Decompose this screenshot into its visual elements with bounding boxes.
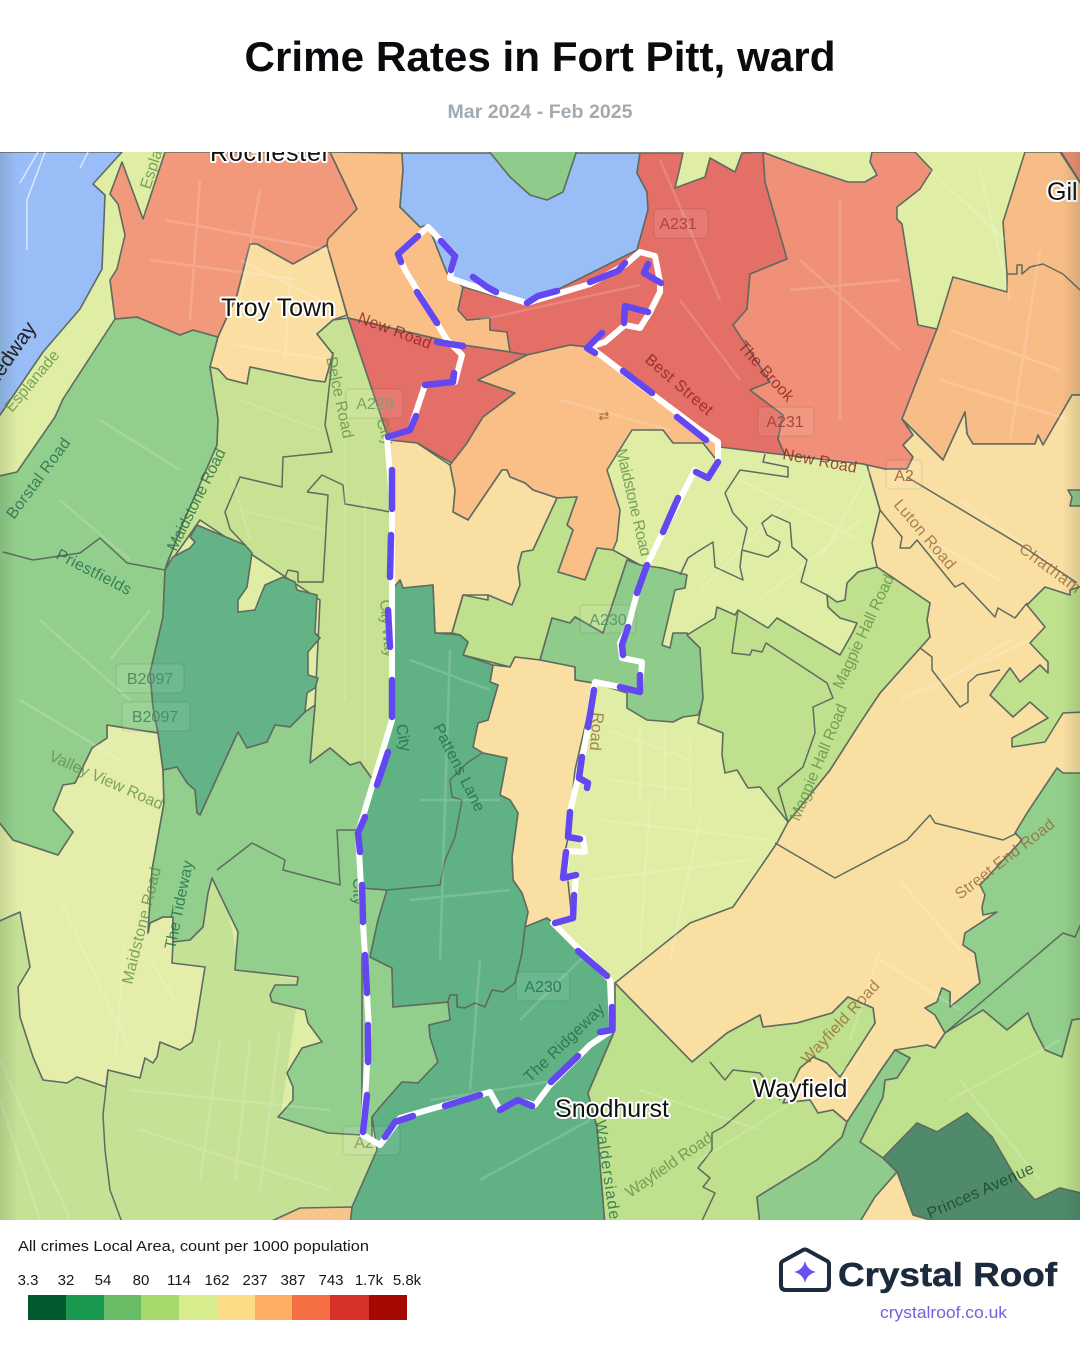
yellow patch bottom south-east <box>860 1172 926 1220</box>
logo url: crystalroof.co.uk <box>880 1303 1008 1322</box>
legend tick values: 80 <box>133 1272 149 1289</box>
road number badges: B2097 <box>132 709 178 726</box>
road name labels: Maidstone Road <box>612 447 654 558</box>
road number badges: A231 <box>659 216 697 233</box>
road name labels: The Tideway <box>162 859 197 951</box>
road name labels: City <box>392 723 414 753</box>
road number badges: A2 <box>354 1135 374 1152</box>
road name labels: Road <box>586 712 606 751</box>
light green east <box>687 567 930 822</box>
logo wordmark: Crystal Roof <box>838 1256 1058 1293</box>
road name labels: Espla <box>138 148 166 191</box>
south-west light green area <box>0 870 377 1225</box>
road name labels: The Ridgeway <box>521 1001 608 1086</box>
road number badges: A231 <box>766 414 804 431</box>
road name labels: City Way <box>376 599 398 658</box>
salmon far corner <box>1061 152 1080 181</box>
road name labels: Magpie Hall Road <box>787 702 851 824</box>
big left green area <box>0 317 218 855</box>
legend title: All crimes Local Area, count per 1000 population <box>18 1238 369 1255</box>
road name labels: Borstal Road <box>4 435 74 522</box>
river Medway <box>0 152 122 415</box>
salmon east area <box>733 152 937 469</box>
Delce light green area <box>165 318 392 780</box>
legend tick values: 54 <box>95 1272 111 1289</box>
orange top right <box>902 152 1080 460</box>
place name labels: Wayfield <box>753 1075 847 1103</box>
bay water <box>400 153 648 305</box>
road name labels: Wayfield Road <box>798 978 884 1068</box>
map edge shading <box>0 152 18 1220</box>
road name labels: Street End Road <box>952 816 1058 903</box>
green peninsula <box>488 150 577 200</box>
road number badges: B2097 <box>127 671 173 688</box>
medium green A230 area <box>540 560 705 722</box>
crime-rate areas <box>0 150 1080 1225</box>
road number badges: A230 <box>589 612 627 629</box>
legend tick values: 743 <box>318 1272 344 1289</box>
legend tick values <box>18 1272 422 1289</box>
road name labels: Priestfields <box>53 546 134 599</box>
interior area boundaries <box>3 264 1080 1225</box>
place name labels: Gil <box>1047 178 1078 206</box>
medium green strip inside ward <box>362 888 450 1140</box>
yellow below centre <box>389 440 557 633</box>
Rochester salmon area <box>110 152 357 337</box>
road name labels: Luton Road <box>890 497 959 573</box>
logo: Crystal Roof <box>781 1250 1058 1322</box>
road number badges <box>116 209 922 1155</box>
road name labels: The Brook <box>734 338 798 406</box>
ward light green <box>452 497 640 667</box>
road name labels: Maidstone Road <box>119 865 165 986</box>
medium green east edge <box>925 768 1080 1057</box>
light green north-east pocket <box>990 585 1080 747</box>
place name labels <box>210 139 1078 1123</box>
subtitle: date range: Mar 2024 - Feb 2025 <box>448 102 633 123</box>
title: Crime Rates in Fort Pitt, ward <box>244 33 836 80</box>
legend tick values: 1.7k <box>355 1272 384 1289</box>
medium green strip south-east <box>757 1050 910 1225</box>
legend <box>18 1238 422 1320</box>
red east area <box>458 152 787 455</box>
Troy Town yellow area <box>210 244 347 384</box>
road name labels: Waldersiade <box>591 1119 623 1221</box>
ward boundary: blue dashes <box>358 236 718 1137</box>
ward boundary: white line <box>358 227 718 1145</box>
dark green west area <box>150 525 320 815</box>
place name labels: Snodhurst <box>555 1095 669 1123</box>
road name labels: Best Street <box>641 351 716 419</box>
road name labels: City <box>349 878 367 906</box>
legend colour scale <box>28 1295 407 1320</box>
small green patch <box>1068 490 1080 506</box>
orange central north area <box>327 152 510 352</box>
road name labels: New Road <box>356 310 434 353</box>
icon: house with sparkle <box>781 1250 829 1290</box>
faint streets <box>0 160 1070 1220</box>
legend tick values: 162 <box>204 1272 230 1289</box>
road name labels: New Road <box>781 446 858 477</box>
legend tick values: 237 <box>242 1272 268 1289</box>
legend tick values: 32 <box>58 1272 74 1289</box>
legend tick values: 3.3 <box>18 1272 38 1289</box>
orange patch bottom <box>272 1206 353 1220</box>
darkest green south-east <box>883 1113 1080 1225</box>
road name labels <box>0 148 1080 1223</box>
railway station icon: ⇄ <box>599 408 610 423</box>
road number badges: A2 <box>894 468 914 485</box>
medium green south-west area <box>148 705 373 1135</box>
road name labels: Princes Avenue <box>925 1160 1037 1223</box>
place name labels: Rochester <box>210 139 330 167</box>
dark green south <box>350 918 615 1225</box>
road name labels: Magpie Hall Road <box>830 572 898 692</box>
place name labels: Troy Town <box>221 294 335 322</box>
map base <box>0 152 1024 1149</box>
road name labels: Maidstone Road <box>164 446 230 554</box>
road name labels: City <box>372 416 397 447</box>
road name labels: Esplanade <box>2 347 63 416</box>
orange central area <box>450 345 718 580</box>
road name labels: Delce Road <box>322 355 356 440</box>
road number badges: A229 <box>356 396 394 413</box>
road name labels: Valley View Road <box>46 748 166 813</box>
road name labels: Wayfield Road <box>623 1129 716 1201</box>
road name labels: Pattens Lane <box>429 721 488 815</box>
yellow strip <box>473 657 595 927</box>
road number badges: A230 <box>524 979 562 996</box>
river piers <box>20 152 88 250</box>
dark green centre <box>358 580 528 1008</box>
light green south-east <box>588 983 875 1225</box>
south-west pale area <box>0 725 205 1087</box>
legend tick values: 114 <box>167 1272 191 1289</box>
yellow north-east and south-east area <box>615 395 1080 1122</box>
red west area <box>348 318 527 465</box>
legend tick values: 387 <box>280 1272 306 1289</box>
legend tick values: 5.8k <box>393 1272 422 1289</box>
